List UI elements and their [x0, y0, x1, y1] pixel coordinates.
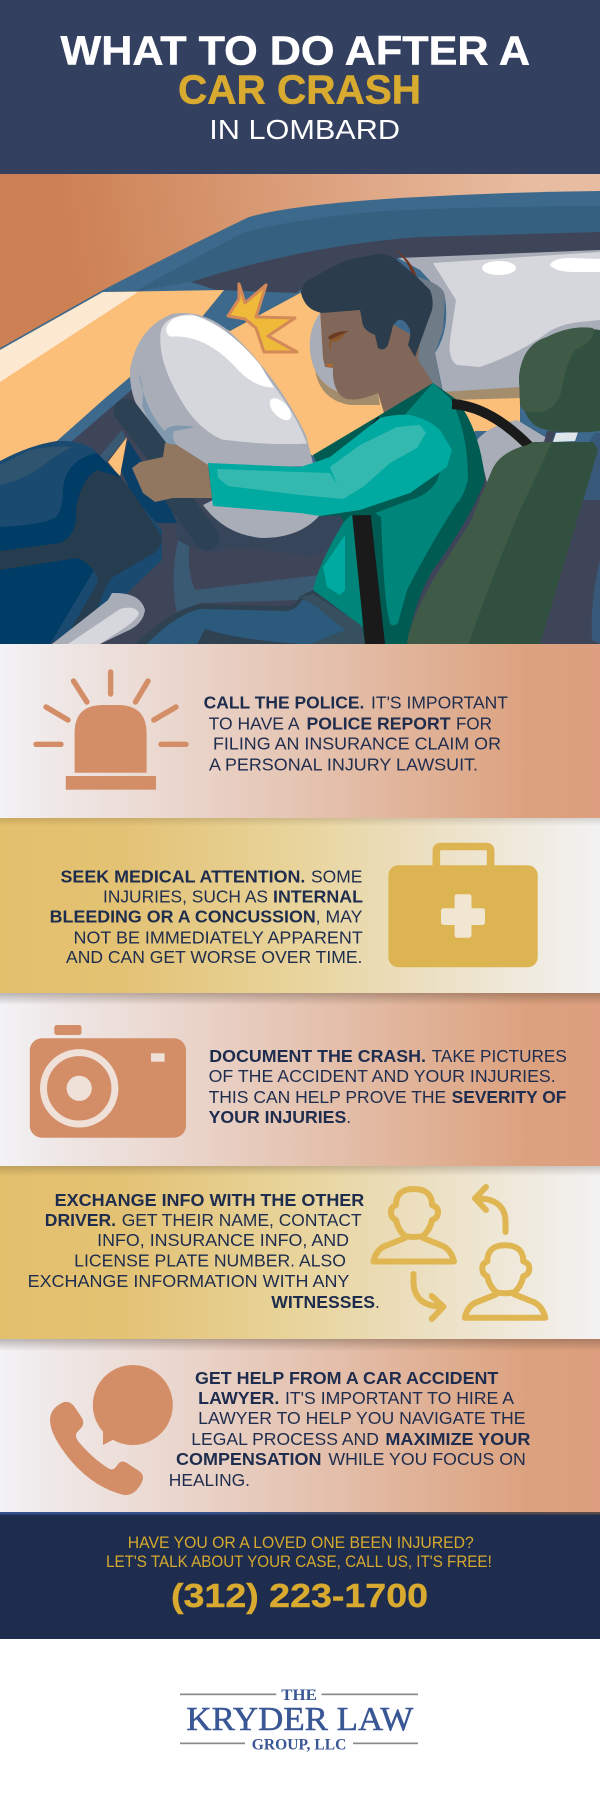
text: get help: LAWYER TO HELP YOU NAVIGATE THE — [198, 1408, 525, 1428]
text: seek medical attention: INJURIES, SUCH AS — [103, 886, 268, 906]
phone number: (312) 223-1700 — [171, 1577, 428, 1614]
text: get help: COMPENSATION — [176, 1449, 322, 1469]
text: exchange info: DRIVER. — [45, 1210, 116, 1230]
text: call the police: FOR — [456, 713, 492, 733]
text: seek medical attention — [50, 866, 363, 967]
text: get help: WHILE YOU FOCUS ON — [328, 1449, 526, 1469]
text: call the police: TO HAVE A — [209, 713, 300, 733]
text: document the crash: . — [346, 1107, 351, 1127]
arrow: down-right — [414, 1274, 444, 1319]
head — [301, 250, 445, 413]
airbag — [130, 313, 314, 466]
windshield — [0, 290, 520, 470]
arm — [320, 455, 441, 516]
logo: Kryder Law Group: THE — [281, 1687, 317, 1704]
logo: Kryder Law Group: KRYDER LAW — [186, 1701, 414, 1738]
console and dash lower — [174, 540, 320, 613]
torso — [313, 383, 485, 644]
text: seek medical attention: SOME — [311, 866, 362, 886]
panel: document the crash — [0, 993, 600, 1166]
panel: exchange info — [0, 1166, 600, 1339]
text: get help: GET HELP FROM A CAR ACCIDENT — [195, 1368, 499, 1388]
text: exchange info: . — [375, 1292, 380, 1312]
text: exchange info: EXCHANGE INFORMATION WITH ANY — [28, 1271, 350, 1291]
dashboard foreground — [0, 441, 162, 644]
text: document the crash: SEVERITY OF — [452, 1087, 567, 1107]
header — [0, 0, 600, 174]
steering wheel inner — [121, 440, 177, 523]
text: exchange info: WITNESSES — [271, 1292, 375, 1312]
legs — [135, 590, 363, 644]
title line: car crash: CAR CRASH — [178, 67, 421, 113]
rear seat — [477, 420, 550, 483]
panel: call to action footer: LET'S TALK ABOUT YOUR CASE, CALL US, IT'S FREE! — [106, 1553, 492, 1571]
text: exchange info: INFO, INSURANCE INFO, AND — [97, 1230, 349, 1250]
text: exchange info: LICENSE PLATE NUMBER. ALSO — [74, 1251, 346, 1271]
text: get help: LAWYER. — [198, 1388, 279, 1408]
text: document the crash: OF THE ACCIDENT AND YOUR INJURIES. — [209, 1066, 556, 1086]
crash star — [228, 284, 297, 352]
text: seek medical attention: SEEK MEDICAL ATTENTION. — [60, 866, 305, 886]
steering wheel — [126, 411, 207, 538]
text: call the police: IT'S IMPORTANT — [371, 692, 508, 712]
text: call the police: CALL THE POLICE. — [204, 692, 364, 712]
text: document the crash: DOCUMENT THE CRASH. — [209, 1046, 426, 1066]
text: call the police: POLICE REPORT — [306, 713, 451, 733]
text: call to action: HAVE YOU OR A LOVED ONE BEEN INJURED? — [128, 1534, 474, 1552]
text: exchange info: GET THEIR NAME, CONTACT — [122, 1210, 362, 1230]
driver seat — [407, 431, 598, 644]
panel: call the police — [0, 644, 600, 818]
text: get help: HEALING. — [169, 1470, 250, 1490]
text: seek medical attention: AND CAN GET WORSE OVER TIME. — [66, 947, 362, 967]
car roof and body — [0, 191, 600, 644]
subtitle: in Lombard: IN LOMBARD — [209, 114, 400, 145]
belts — [352, 508, 385, 644]
logo: Kryder Law Group: GROUP, LLC — [252, 1736, 346, 1753]
text: get help: IT'S IMPORTANT TO HIRE A — [285, 1388, 514, 1408]
icon: two people exchanging info — [374, 1187, 545, 1319]
arrow: up-left — [475, 1187, 506, 1232]
icon: police siren — [36, 672, 186, 790]
text: seek medical attention: , MAY — [316, 906, 363, 926]
text: seek medical attention: INTERNAL — [273, 886, 363, 906]
icon: camera — [30, 1025, 186, 1138]
text: call the police — [204, 692, 508, 774]
text: exchange info: EXCHANGE INFO WITH THE OTHER — [55, 1190, 365, 1210]
rear cabin panel — [398, 250, 600, 392]
icon: first aid kit — [388, 846, 538, 967]
text: call the police: FILING AN INSURANCE CLAIM OR — [213, 733, 501, 753]
panel: call to action footer — [0, 1512, 600, 1639]
text: call the police: A PERSONAL INJURY LAWSUIT. — [209, 754, 478, 774]
logo: Kryder Law Group — [180, 1687, 418, 1753]
text: exchange info — [28, 1190, 380, 1312]
text: document the crash: THIS CAN HELP PROVE THE — [209, 1087, 446, 1107]
panel: seek medical attention — [0, 818, 600, 993]
title line: what to do after a: WHAT TO DO AFTER A — [60, 27, 530, 73]
headrest — [519, 327, 600, 432]
hand — [132, 443, 212, 502]
text: get help — [169, 1368, 531, 1490]
text: document the crash: TAKE PICTURES — [432, 1046, 567, 1066]
icon: phone and speech bubble — [50, 1365, 173, 1495]
text: seek medical attention: NOT BE IMMEDIATELY APPARENT — [74, 927, 363, 947]
text: document the crash: YOUR INJURIES — [209, 1107, 346, 1127]
text: seek medical attention: BLEEDING OR A CONCUSSION — [50, 906, 316, 926]
panel: get help from a lawyer — [0, 1339, 600, 1512]
text: get help: MAXIMIZE YOUR — [385, 1429, 531, 1449]
text: document the crash — [209, 1046, 567, 1127]
illustration: driver hit by airbag in car — [0, 174, 600, 644]
text: get help: LEGAL PROCESS AND — [191, 1429, 379, 1449]
